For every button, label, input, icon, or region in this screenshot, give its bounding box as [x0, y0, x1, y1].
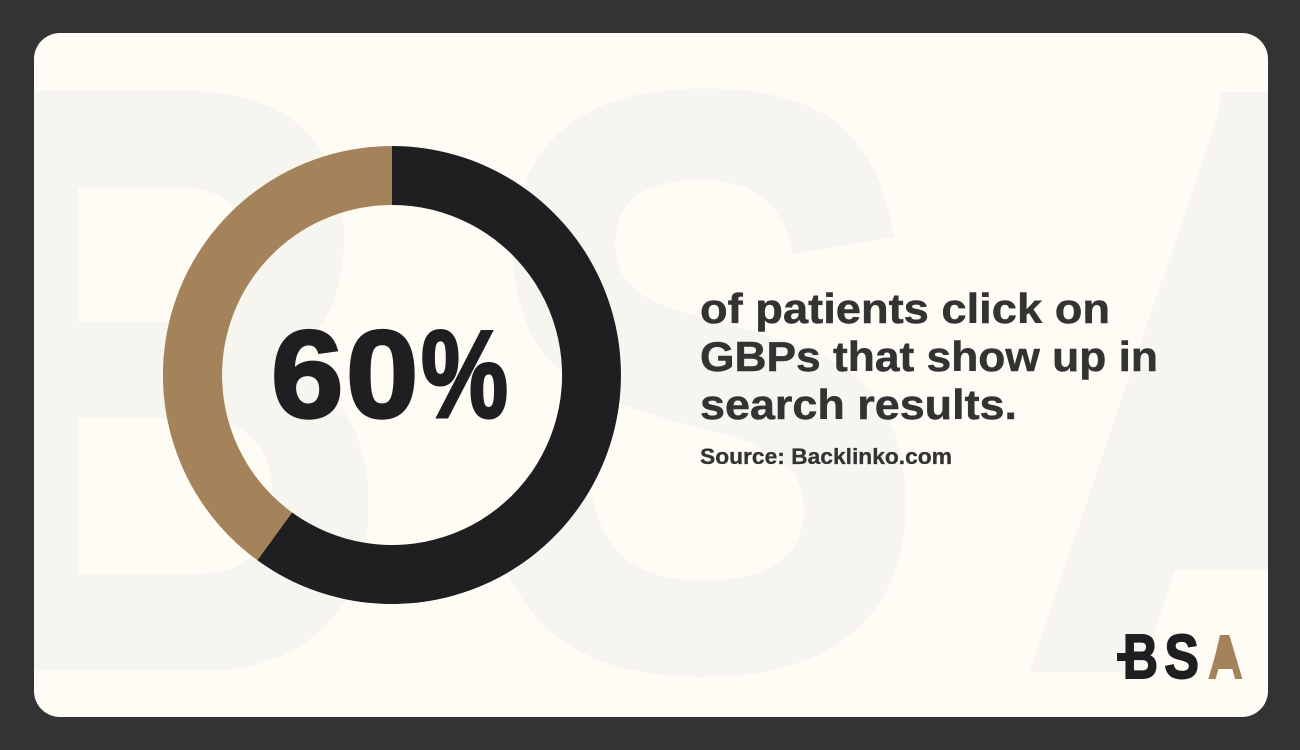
statement text	[700, 285, 1158, 428]
statement text: of patients click on	[700, 285, 1110, 332]
logo: BSA	[1117, 622, 1244, 693]
donut center value: 0	[346, 306, 418, 444]
logo: BSA: A	[1207, 624, 1244, 693]
donut segment: 60 percent	[257, 146, 621, 604]
donut center value: %	[421, 306, 508, 444]
statement text: GBPs that show up in	[700, 333, 1158, 380]
statement text: search results.	[700, 381, 1017, 428]
donut segment: remaining 40 percent	[163, 146, 392, 560]
logo: BSA: B	[1123, 622, 1158, 691]
donut center value: 6	[271, 306, 343, 444]
watermark A solid fill	[1172, 92, 1268, 570]
logo: BSA: S	[1164, 623, 1199, 692]
donut chart: 60 percent	[163, 146, 621, 604]
donut center value	[271, 306, 508, 444]
source line: Source: Backlinko.com	[700, 444, 952, 469]
